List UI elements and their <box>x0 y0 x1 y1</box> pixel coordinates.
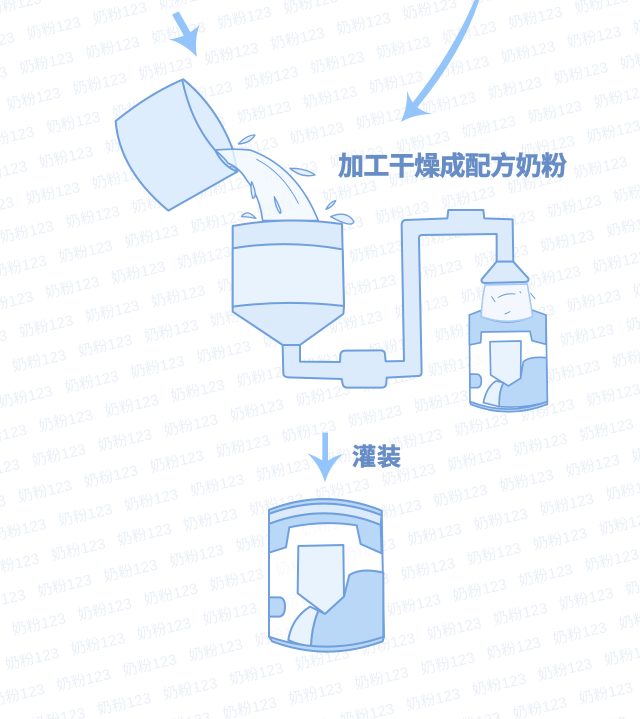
large can lid highlight <box>269 504 382 525</box>
watermark pattern: 奶粉123 奶粉123 奶粉123 奶粉123 奶粉123 奶粉123 奶粉123 奶粉123 奶粉123 奶粉123 <box>0 117 640 281</box>
blue top area <box>469 310 546 345</box>
icon: powder stream <box>215 149 318 221</box>
icon: dispensing nozzle <box>481 262 528 283</box>
icon: powder splashes <box>238 135 354 224</box>
large can base <box>269 637 384 652</box>
can tab <box>470 374 481 388</box>
powder inside can <box>481 284 533 321</box>
powder marks <box>492 292 535 314</box>
watermark pattern: 奶粉123 奶粉123 奶粉123 奶粉123 奶粉123 奶粉123 奶粉123 奶粉123 奶粉123 奶粉123 <box>0 381 640 545</box>
icon: small can <box>469 284 547 412</box>
icon: pouring jug <box>116 79 237 211</box>
large can shield <box>298 545 344 614</box>
watermark pattern: 奶粉123 奶粉123 奶粉123 奶粉123 奶粉123 奶粉123 奶粉123 奶粉123 奶粉123 奶粉123 <box>0 248 640 412</box>
large can tab <box>269 597 285 617</box>
icon: pipeline <box>283 210 513 388</box>
arrow: long curved arrow <box>401 0 479 122</box>
large can body <box>269 499 384 652</box>
can shield <box>490 341 521 386</box>
watermark pattern: 奶粉123 奶粉123 奶粉123 奶粉123 奶粉123 奶粉123 奶粉123 奶粉123 奶粉123 奶粉123 <box>3 510 640 674</box>
large can blue panel <box>311 570 383 647</box>
arrow: short arrow into jug <box>169 11 200 57</box>
can blue panel <box>499 357 547 407</box>
can base <box>470 402 547 412</box>
watermark pattern: 奶粉123 奶粉123 奶粉123 奶粉123 奶粉123 奶粉123 奶粉123 奶粉123 奶粉123 奶粉123 <box>0 546 640 710</box>
heading: process label: 加工干燥成配方奶粉 <box>338 151 567 181</box>
watermark pattern: 奶粉123 奶粉123 奶粉123 奶粉123 奶粉123 奶粉123 奶粉123 奶粉123 奶粉123 奶粉123 <box>0 83 640 247</box>
arrow: down arrow <box>307 433 343 482</box>
large can shoulder panel <box>269 513 382 553</box>
label: filling: 灌装 <box>352 444 401 471</box>
can body <box>469 315 547 409</box>
large can light panel <box>288 607 318 646</box>
large can lid <box>269 499 382 515</box>
can light panel <box>483 381 503 407</box>
icon: drying hopper <box>233 220 344 345</box>
watermark pattern: 奶粉123 奶粉123 奶粉123 奶粉123 奶粉123 奶粉123 奶粉123 奶粉123 奶粉123 奶粉123 <box>0 416 635 579</box>
icon: large can <box>269 499 384 652</box>
